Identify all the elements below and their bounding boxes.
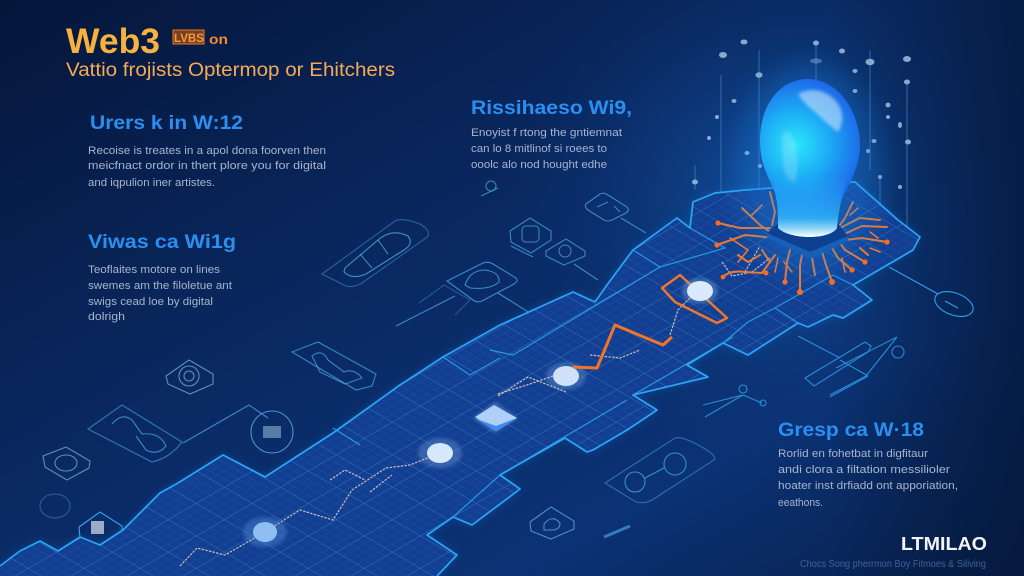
node: upper right with orange frame <box>662 275 727 323</box>
text block: viwas: dolrigh <box>88 311 125 323</box>
brand logo and tagline <box>800 534 987 570</box>
text block: gresp: andi clora a filtation messilioler <box>778 464 950 476</box>
title badge: LVBS <box>174 31 204 45</box>
text block: rissihaeso: can lo 8 mitlinof si roees to <box>471 143 607 155</box>
platform nodes <box>243 275 727 547</box>
bulb base glow <box>772 175 848 237</box>
text block: viwas: swigs cead loe by digital <box>88 296 213 308</box>
text block: gresp: Rorlid en fohetbat in digfitaur <box>778 448 928 460</box>
text block: gresp: hoater inst drfiadd ont apporiation, <box>778 480 958 492</box>
icon: panel upper middle left <box>292 342 376 390</box>
node: centre <box>546 362 586 390</box>
connector lines and outline icons around the platform <box>40 181 977 545</box>
central isometric platform <box>0 182 920 576</box>
text block: users: Recoise is treates in a apol dona foorven then <box>88 145 326 157</box>
main title: Vattio frojists Optermop or Ehitchers <box>66 60 395 81</box>
text block: users: meicfnact ordor in thert plore you for digital <box>88 160 326 172</box>
bulb body <box>760 79 860 237</box>
text block: rissihaeso: Enoyist f rtong the gntiemnat <box>471 127 622 139</box>
brand logo and tagline: Chocs Song pherrmon Boy Fitmoes & Siliving <box>800 559 986 570</box>
text block: users <box>88 113 326 189</box>
icon: capsule panel upper left <box>322 220 428 287</box>
text block: rissihaeso <box>471 98 632 171</box>
node: chip <box>473 402 518 433</box>
circuit traces, white <box>180 246 770 566</box>
icon: brain panel <box>396 262 533 326</box>
chip socket <box>767 214 848 259</box>
text block: gresp: eeathons. <box>778 497 823 509</box>
node: lower middle <box>418 438 462 468</box>
globe land <box>782 90 842 182</box>
data streams behind the globe <box>692 40 911 230</box>
platform glow <box>0 182 920 576</box>
icon: pill right <box>889 267 977 321</box>
node: lower left <box>243 517 287 547</box>
text block: rissihaeso: ooolc alo nod hought edhe <box>471 159 607 171</box>
platform outline <box>0 182 920 576</box>
icon: stack hexagon left <box>40 447 90 518</box>
text block: viwas: Viwas ca Wi1g <box>88 232 236 253</box>
platform surface <box>0 182 920 576</box>
text block: viwas: Teoflaites motore on lines <box>88 264 221 276</box>
inner panel outlines <box>333 228 853 517</box>
text block: users: Urers k in W:12 <box>90 113 243 134</box>
glowing globe bulb on chip <box>736 65 880 275</box>
text block: rissihaeso: Rissihaeso Wi9, <box>471 98 632 119</box>
orange circuit around globe <box>714 192 890 295</box>
text block: users: and iqpulion iner artistes. <box>88 177 215 189</box>
icon: small nodes lower <box>703 385 766 417</box>
main title <box>66 22 395 81</box>
orange rising trend line <box>573 325 672 368</box>
main title: Web3 <box>66 22 160 61</box>
icon: hexagon upper pair <box>510 218 598 280</box>
text block: viwas: swemes am the filoletue ant <box>88 280 232 292</box>
text block: gresp: Gresp ca W·18 <box>778 420 924 441</box>
icon: platform edge chip <box>79 512 122 545</box>
icon: link panel left <box>88 405 268 462</box>
main title: on <box>209 31 228 47</box>
icon: rounded badge top <box>481 181 646 233</box>
text block: gresp <box>778 420 958 509</box>
brand logo and tagline: LTMILAO <box>901 534 987 554</box>
icon: hexagon left middle <box>166 360 213 394</box>
icon: car panel bottom <box>605 438 715 503</box>
icon: hexagon bottom <box>530 507 630 539</box>
icon: bars lower right <box>798 336 904 397</box>
icon: database node <box>251 411 293 453</box>
text block: viwas <box>88 232 236 323</box>
